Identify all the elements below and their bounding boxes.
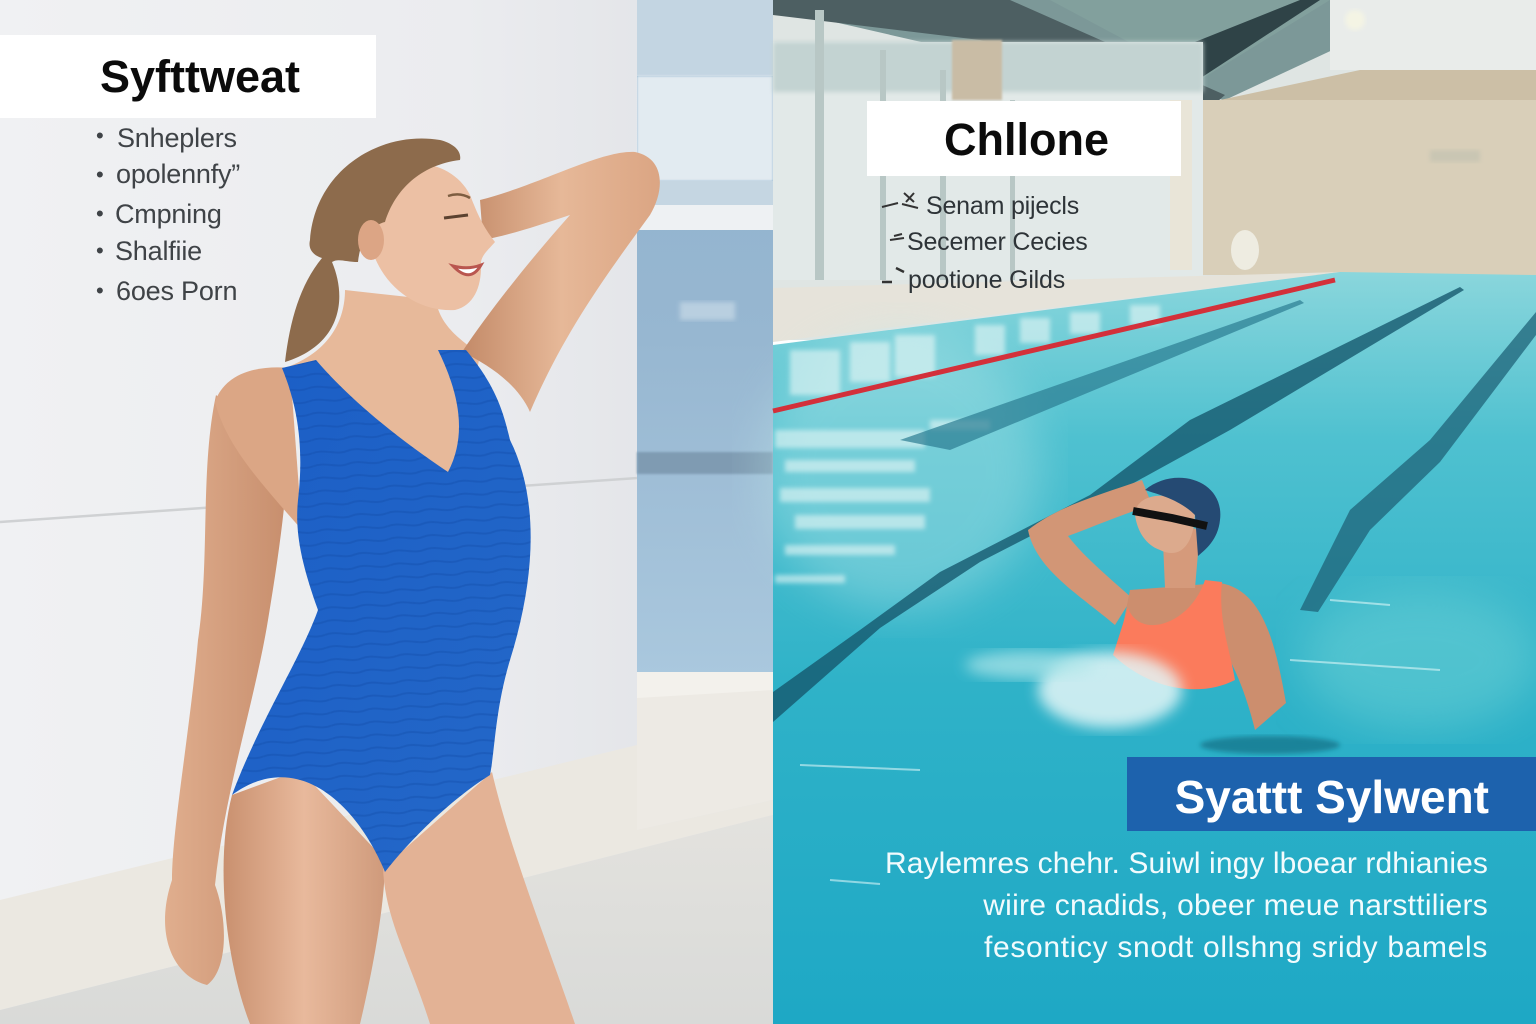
list: left bullet items (96, 123, 240, 306)
list: left bullet items: • (96, 238, 104, 263)
list: left bullet items: • (96, 123, 104, 148)
list: left bullet items: Cmpning (115, 199, 222, 229)
model with blue swimsuit (165, 138, 660, 1024)
list: right items with small icons: pootione Gilds (908, 266, 1065, 294)
left arm (165, 395, 288, 985)
swimmer in orange top (965, 478, 1340, 754)
list: right items with small icons: Secemer Cecies (907, 228, 1088, 256)
head (372, 164, 495, 310)
paragraph: Raylemres chehr. Suiwl ingy lboear rdhianies (885, 847, 1488, 880)
paragraph: wiire cnadids, obeer meue narsttiliers (983, 889, 1488, 922)
list: left bullet items: 6oes Porn (116, 276, 237, 306)
list: left bullet items: • (96, 278, 104, 303)
paragraph (885, 847, 1488, 964)
neck and chest (290, 290, 480, 480)
list: right items with small icons: Senam pijecls (926, 192, 1079, 220)
pool water (760, 272, 1536, 1024)
heading: Syfttweat: Syfttweat (100, 51, 300, 102)
icon: squiggle (882, 192, 918, 284)
heading: Chllone (867, 101, 1181, 176)
raised arm (462, 152, 660, 412)
ear (358, 220, 384, 260)
list: right items with small icons (882, 192, 1088, 294)
list: left bullet items: Shalfiie (115, 236, 202, 266)
list: left bullet items: Snheplers (117, 123, 237, 153)
banner: Syattt Sylwent (1127, 757, 1536, 831)
pool hall background (773, 0, 1536, 342)
paragraph: fesonticy snodt ollshng sridy bamels (984, 931, 1488, 964)
heading: Chllone: Chllone (944, 114, 1109, 165)
list: left bullet items: opolennfy” (116, 159, 240, 189)
hair (285, 138, 460, 362)
list: left bullet items: • (96, 201, 104, 226)
swimsuit (225, 345, 540, 875)
heading: Syfttweat (0, 35, 376, 118)
legs (224, 770, 385, 1024)
face details (444, 194, 481, 275)
left wall background (0, 0, 773, 1024)
banner: Syattt Sylwent: Syattt Sylwent (1175, 771, 1489, 823)
list: left bullet items: • (96, 162, 104, 187)
